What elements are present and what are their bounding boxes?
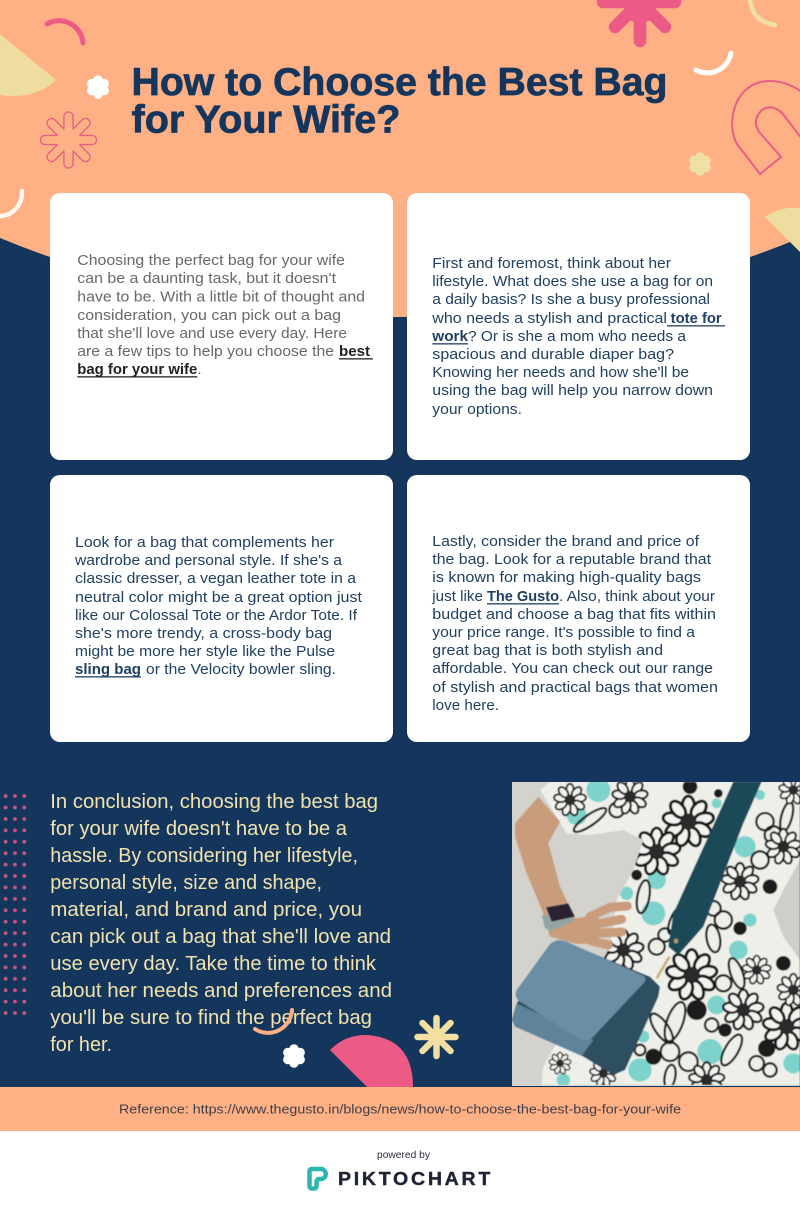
text: lifestyle paragraph: a daily basis? Is she a busy professional	[432, 292, 710, 308]
text: intro paragraph: .	[198, 362, 202, 378]
icon: cream wedge right	[765, 208, 800, 252]
panel: lifestyle card	[407, 193, 750, 460]
text: lifestyle paragraph: using the bag will help you narrow down	[432, 383, 713, 399]
text: intro paragraph: are a few tips to help you choose the	[77, 344, 334, 360]
decoration: pink dot grid	[1, 792, 29, 1020]
text: lifestyle paragraph: spacious and durable diaper bag?	[432, 347, 674, 363]
icon: white flower	[87, 75, 109, 99]
icon: pink wedge bottom	[330, 1035, 413, 1087]
reference bar	[0, 1087, 800, 1131]
icon: cream flower	[689, 152, 711, 176]
text: conclusion paragraph: for your wife doesn't have to be a	[50, 818, 348, 840]
watch	[542, 903, 575, 931]
text: brand and price paragraph: your price range. It's possible to find a	[432, 625, 696, 641]
icon: white arc left	[0, 191, 22, 216]
text: conclusion paragraph: use every day. Take the time to think	[50, 953, 377, 975]
text: brand and price paragraph: affordable. You can check out our range	[432, 661, 713, 677]
icon: cream wedge left	[0, 34, 56, 96]
text: conclusion paragraph: about her needs and preferences and	[50, 980, 392, 1002]
icon: white arc top right	[696, 53, 731, 73]
title: for Your Wife?	[132, 99, 400, 142]
text: brand and price paragraph: . Also, think about your	[559, 589, 715, 605]
clasp	[657, 957, 669, 978]
text: brand and price paragraph: is known for making high-quality bags	[432, 570, 701, 586]
text: brand and price paragraph: of stylish and practical bags that women	[432, 680, 718, 696]
text: lifestyle paragraph	[431, 256, 725, 418]
text: style paragraph: or the Velocity bowler sling.	[146, 662, 336, 678]
text: style paragraph: neutral color might be a great option just	[75, 590, 362, 606]
photo: woman in floral dress with blue crossbody bag	[510, 776, 800, 1098]
text: lifestyle paragraph: your options.	[432, 402, 522, 418]
title: How to Choose the Best Bag	[132, 61, 668, 104]
icon: peach arc over text	[255, 1010, 292, 1033]
text: style paragraph: classic dresser, a vegan leather tote in a	[75, 571, 357, 587]
text: intro paragraph: can be a daunting task, but it doesn't	[77, 271, 336, 287]
text: lifestyle paragraph: First and foremost, think about her	[432, 256, 671, 272]
text: brand and price paragraph: love here.	[432, 698, 499, 714]
text: lifestyle paragraph: work	[431, 329, 469, 345]
text: style paragraph	[74, 535, 362, 678]
text: intro paragraph: consideration, you can pick out a bag	[77, 308, 341, 324]
text: intro paragraph	[77, 253, 373, 378]
icon: cream arc top right	[750, 0, 775, 25]
text: brand and price paragraph: Lastly, consider the brand and price of	[432, 534, 700, 550]
text: conclusion paragraph: hassle. By considering her lifestyle,	[50, 845, 358, 867]
text: powered by: powered by	[377, 1149, 431, 1161]
text: brand and price paragraph: just like	[431, 589, 483, 605]
icon: pink outlined star	[45, 116, 92, 164]
icon: cream star bottom	[418, 1018, 456, 1056]
text: lifestyle paragraph: who needs a stylish and practical	[431, 311, 667, 327]
text: intro paragraph: best	[339, 344, 370, 360]
title	[132, 61, 668, 142]
text: intro paragraph: have to be. With a little bit of thought and	[77, 289, 365, 305]
text: conclusion paragraph: personal style, size and shape,	[50, 872, 322, 894]
fingers	[590, 906, 627, 945]
text: conclusion paragraph	[50, 791, 392, 1056]
text: brand and price paragraph: budget and choose a bag that fits within	[432, 607, 716, 623]
icon: white flower bottom	[283, 1044, 305, 1068]
text: conclusion paragraph: In conclusion, choosing the best bag	[50, 791, 378, 813]
text: conclusion paragraph: material, and brand and price, you	[50, 899, 362, 921]
panel: brand and price card	[407, 475, 750, 742]
text: lifestyle paragraph: lifestyle. What does she use a bag for on	[432, 274, 713, 290]
text: reference url: Reference: https://www.thegusto.in/blogs/news/how-to-choose-the-best-bag-for-your-wife	[119, 1102, 681, 1116]
icon: pink arc top left	[47, 21, 83, 43]
strap	[668, 782, 762, 955]
text: brand and price paragraph: the bag. Look for a reputable brand that	[432, 552, 711, 568]
text: brand and price paragraph	[431, 534, 718, 714]
bag	[512, 954, 660, 1076]
text: conclusion paragraph: for her.	[50, 1034, 112, 1056]
text: style paragraph: like our Colossal Tote or the Ardor Tote. If	[75, 608, 358, 624]
text: brand and price paragraph: The Gusto	[487, 589, 559, 605]
icon: pink outlined horseshoe	[732, 81, 800, 174]
dress	[540, 782, 800, 1086]
icon: pink filled star top	[603, 0, 675, 41]
text: intro paragraph: bag for your wife	[77, 362, 197, 378]
text: style paragraph: sling bag	[75, 662, 141, 678]
text: lifestyle paragraph: Knowing her needs and how she'll be	[432, 365, 689, 381]
arm	[515, 797, 598, 944]
text: style paragraph: wardrobe and personal style. If she's a	[74, 553, 343, 569]
text: brand and price paragraph: great bag that is both stylish and	[432, 643, 663, 659]
text: style paragraph: might be more her style like the Pulse	[75, 644, 335, 660]
text: lifestyle paragraph: tote for	[671, 311, 722, 327]
text: intro paragraph: that she'll love and use every day. Here	[77, 326, 347, 342]
text: lifestyle paragraph: ? Or is she a mom who needs a	[468, 329, 687, 345]
text: intro paragraph: Choosing the perfect bag for your wife	[77, 253, 345, 269]
text: style paragraph: she's more trendy, a cross-body bag	[75, 626, 332, 642]
panel: style card	[50, 475, 393, 742]
text: Piktochart wordmark: PIKTOCHART	[338, 1169, 493, 1189]
panel: intro card	[50, 193, 393, 460]
header background: peach curved shape	[0, 0, 800, 317]
text: conclusion paragraph: you'll be sure to find the perfect bag	[50, 1007, 372, 1029]
icon: Piktochart logo mark	[310, 1169, 326, 1188]
text: style paragraph: Look for a bag that complements her	[75, 535, 334, 551]
text: conclusion paragraph: can pick out a bag that she'll love and	[50, 926, 391, 948]
footer: powered by Piktochart	[0, 1131, 800, 1211]
